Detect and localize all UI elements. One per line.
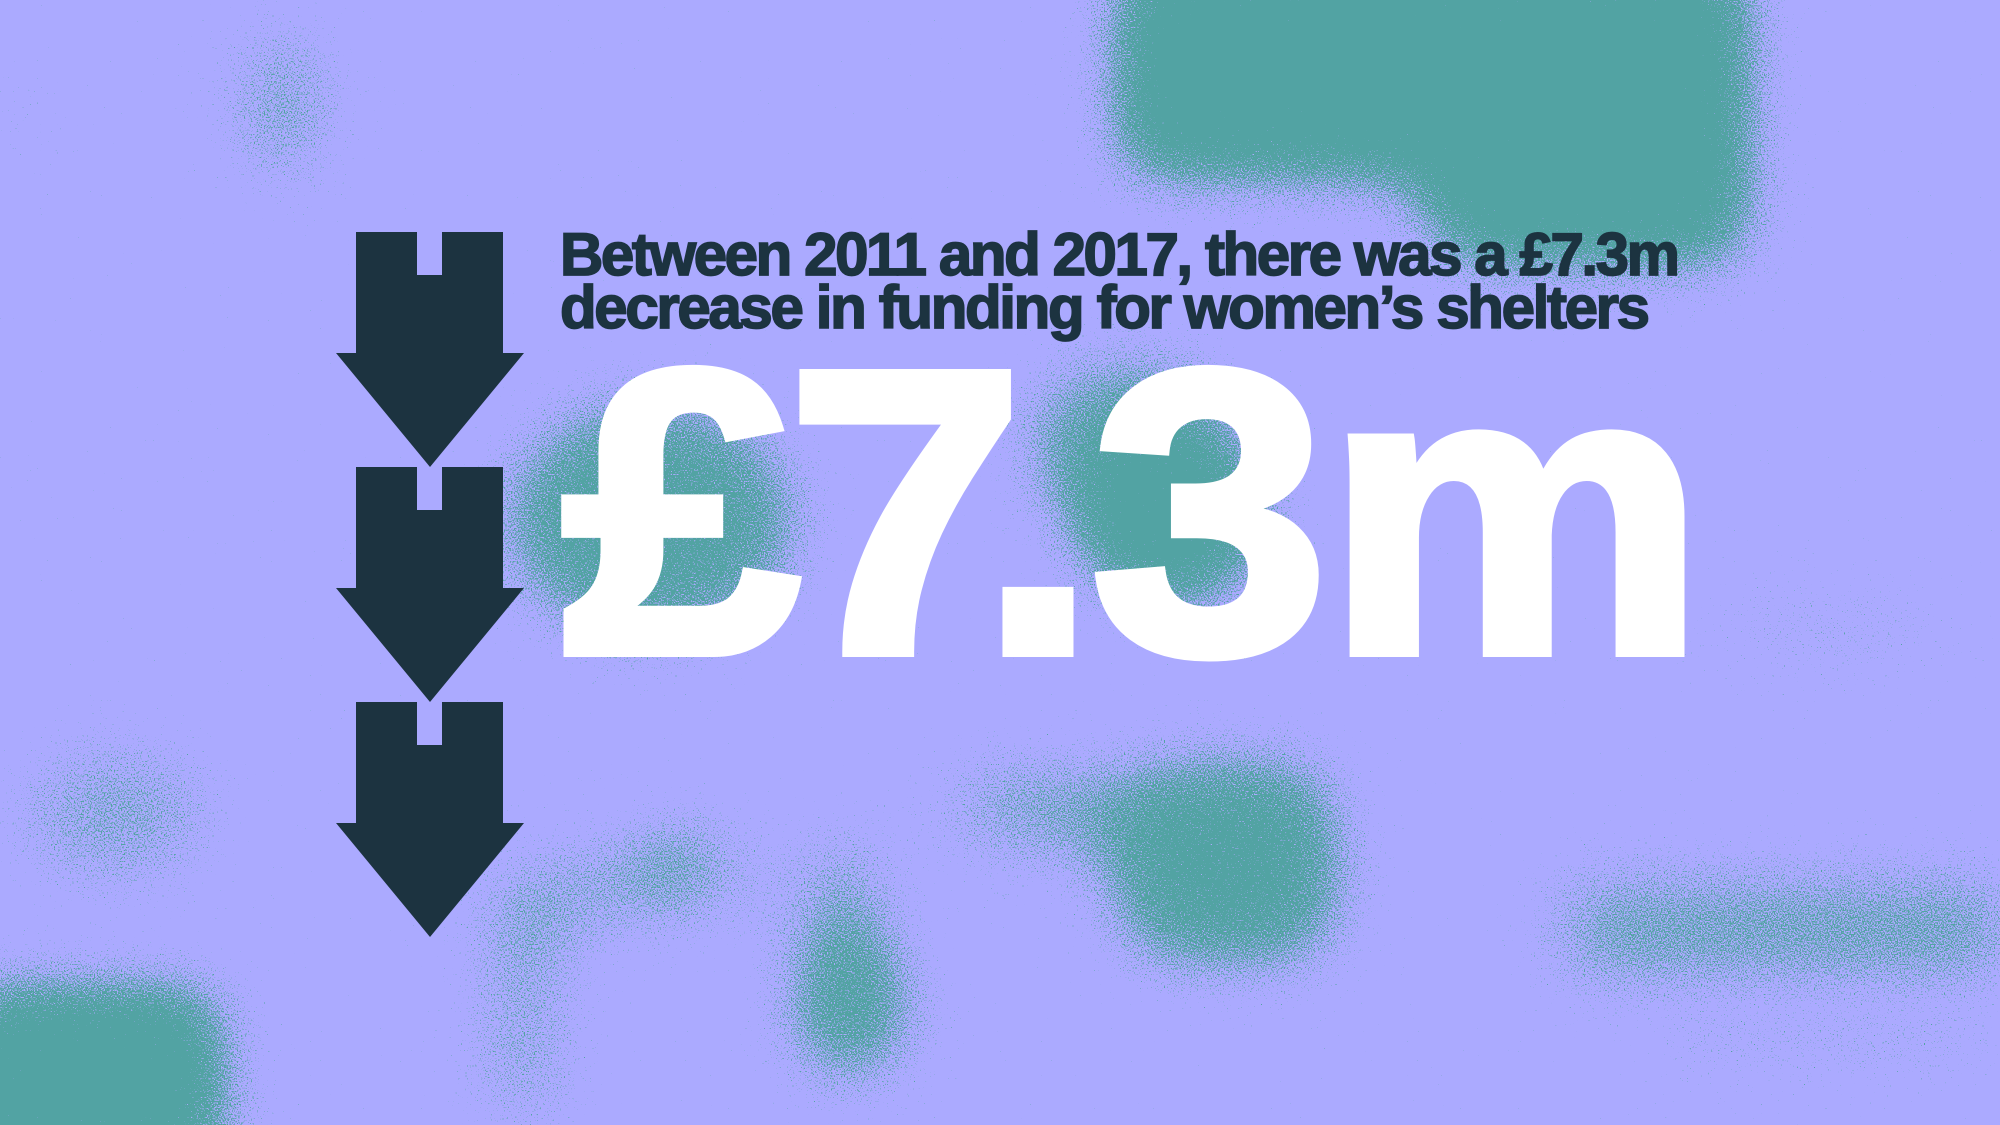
icon: down arrow 2 — [336, 467, 524, 702]
heading text — [560, 221, 1680, 341]
heading line 2: decrease in funding for women’s shelters — [560, 274, 1650, 341]
heading line 1: Between 2011 and 2017, there was a £7.3m — [560, 221, 1680, 288]
icon: stack of three down arrows — [336, 232, 524, 937]
icon: down arrow 3 — [336, 702, 524, 937]
icon: down arrow 1 — [336, 232, 524, 467]
big figure: £7.3m — [562, 287, 1706, 738]
